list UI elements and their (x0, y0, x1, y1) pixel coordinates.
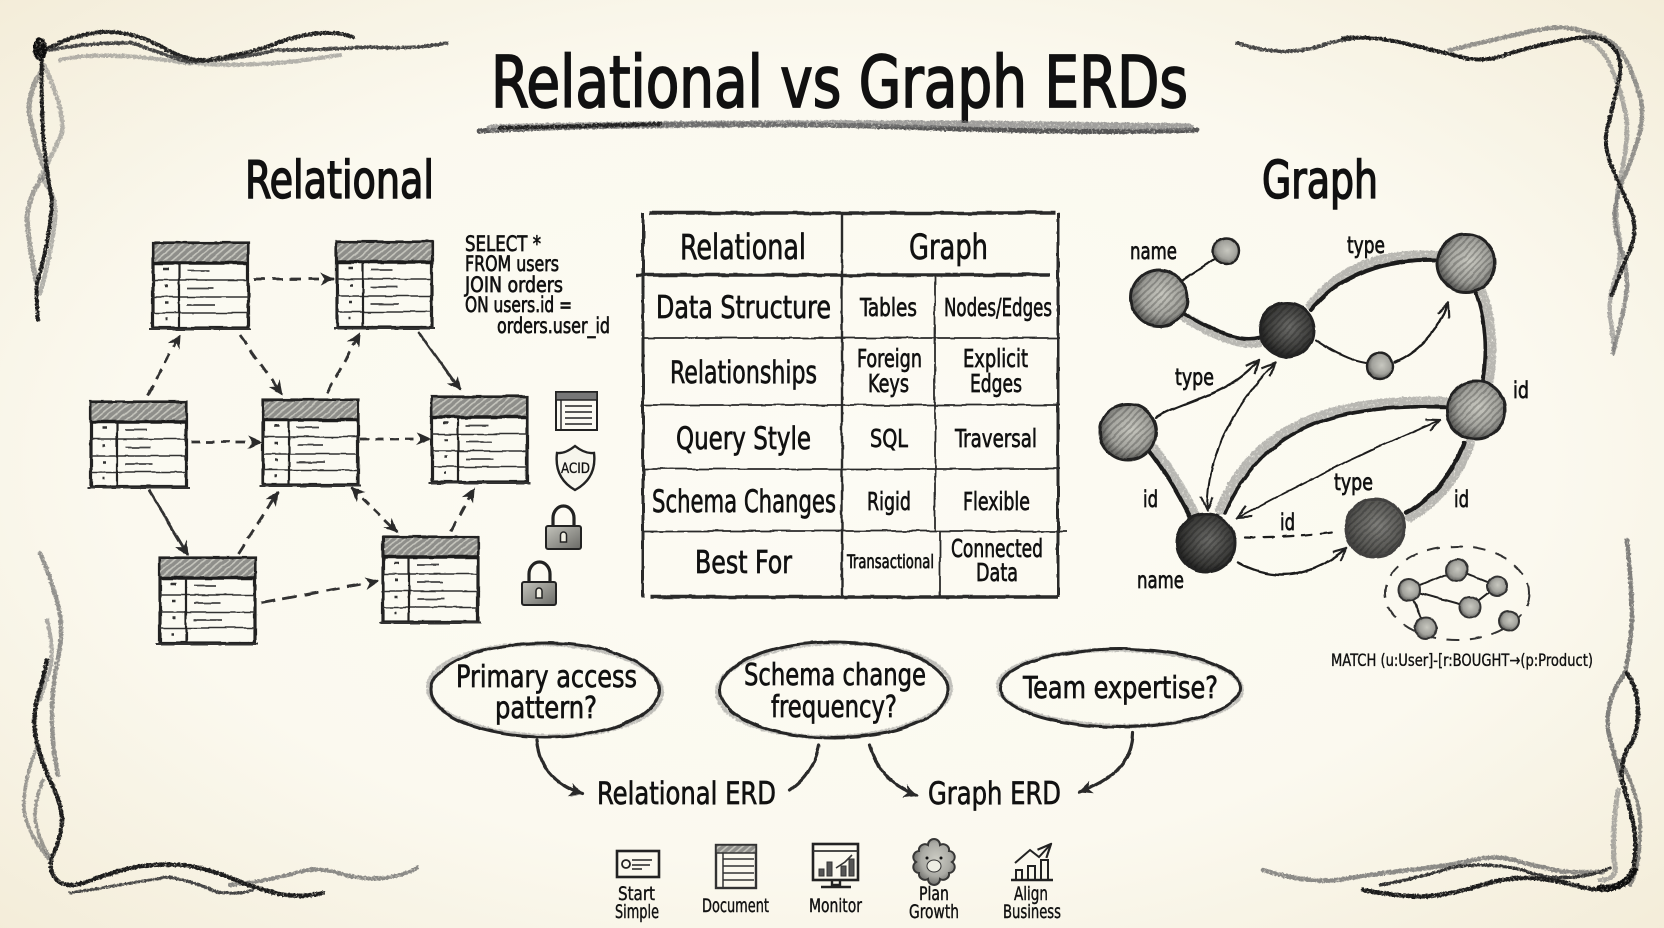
row: best for: Transactional (846, 551, 934, 573)
heading: Graph: Graph (1262, 151, 1378, 211)
node labels: id (1143, 487, 1158, 513)
SQL query text: SELECT * (465, 232, 541, 256)
item: Document (702, 845, 769, 917)
table header (680, 228, 988, 268)
panel: comparison table (636, 213, 1066, 597)
table grid lines (636, 213, 1066, 597)
row: relationships: Explicit (963, 344, 1028, 373)
outcome: Relational ERD: Relational ERD (597, 776, 776, 812)
item: Plan Growth: Plan (919, 883, 949, 905)
node labels (1130, 233, 1529, 594)
row: data structure: Data Structure (656, 290, 831, 326)
border: top-left corner (27, 32, 447, 320)
row: relationships: Keys (868, 369, 909, 398)
table header: Graph (909, 228, 988, 268)
item: Start Simple (615, 851, 659, 923)
icon: padlock (522, 562, 556, 605)
bubble: team expertise: Team expertise? (1022, 671, 1218, 706)
icon: ACID shield (557, 446, 594, 490)
title underline (479, 124, 1197, 131)
node labels: type (1334, 470, 1373, 496)
row: best for: Best For (695, 545, 792, 581)
node labels: type (1175, 365, 1214, 391)
bubble: team expertise (997, 648, 1243, 728)
border: bottom-left corner (24, 553, 417, 896)
item: Plan Growth (909, 839, 959, 923)
panel: decision questions (427, 640, 1243, 812)
row: query style: SQL (870, 424, 908, 453)
panel: best practice icons (615, 839, 1061, 923)
node labels: name (1137, 568, 1184, 594)
arrows to outcomes (537, 733, 1133, 795)
item: Monitor (809, 844, 863, 917)
row: schema changes: Schema Changes (652, 484, 836, 520)
graph edges (1147, 258, 1485, 575)
row: schema changes: Rigid (867, 487, 911, 516)
icon: padlock (546, 506, 581, 549)
mini graph cluster (1385, 546, 1529, 640)
item: Start Simple: Start (618, 883, 655, 905)
item: Document: Document (702, 895, 769, 917)
border: bottom-right corner (1263, 540, 1640, 896)
Cypher query text: MATCH (u:User]-[r:BOUGHT→(p:Product) (1331, 651, 1593, 671)
row: best for: Data (976, 558, 1018, 587)
table header: Relational (680, 228, 806, 268)
heading: Relational: Relational (245, 151, 434, 211)
bubble: schema change frequency: frequency? (771, 690, 897, 725)
row: schema changes: Flexible (963, 487, 1030, 516)
panel: relational table diagram (87, 232, 610, 644)
icon: table (556, 392, 597, 430)
item: Monitor: Monitor (809, 895, 863, 917)
node labels: id (1280, 510, 1295, 536)
bubble: primary access pattern: pattern? (495, 691, 597, 726)
item: Plan Growth: Growth (909, 901, 959, 923)
node labels: type (1347, 233, 1385, 259)
row: data structure: Nodes/Edges (944, 293, 1052, 322)
relational sketch of tables and arrows (87, 242, 530, 644)
row: best for: Connected (951, 534, 1043, 563)
SQL query text (464, 232, 610, 339)
table 1 (149, 243, 251, 329)
item: Align Business: Align (1014, 883, 1048, 905)
row: relationships (670, 344, 1028, 398)
node labels: name (1130, 239, 1177, 265)
panel: graph diagram (1100, 233, 1593, 671)
border: top-right corner (1237, 28, 1642, 353)
title: Relational vs Graph ERDs (491, 41, 1188, 124)
SQL query text: JOIN orders (464, 273, 563, 297)
row: best for (695, 534, 1043, 587)
row: query style: Traversal (954, 424, 1037, 453)
item: Align Business (1003, 844, 1061, 923)
bubble: schema change frequency: Schema change (744, 658, 926, 693)
row: data structure (656, 290, 1052, 326)
item: Start Simple: Simple (615, 901, 659, 923)
SQL query text: ON users.id = (465, 293, 572, 317)
thick edge halos (1153, 255, 1491, 517)
graph nodes (1100, 234, 1505, 572)
bubble: schema change frequency (716, 640, 952, 740)
SQL query text: orders.user_id (497, 314, 610, 339)
relationship arrows (148, 279, 474, 603)
node labels: id (1513, 378, 1529, 404)
outcome: Graph ERD: Graph ERD (928, 776, 1061, 812)
row: relationships: Foreign (857, 344, 922, 373)
SQL query text: FROM users (465, 252, 559, 276)
item: Align Business: Business (1003, 901, 1061, 923)
row: schema changes (652, 484, 1030, 520)
icon: ACID shield: ACID (561, 461, 590, 477)
bubble: primary access pattern: Primary access (456, 660, 637, 695)
row: query style: Query Style (676, 421, 811, 457)
node labels: id (1454, 487, 1469, 513)
row: data structure: Tables (859, 293, 917, 322)
row: query style (676, 421, 1037, 457)
row: relationships: Relationships (670, 355, 817, 391)
bubble: primary access pattern (427, 641, 663, 739)
row: relationships: Edges (970, 369, 1022, 398)
